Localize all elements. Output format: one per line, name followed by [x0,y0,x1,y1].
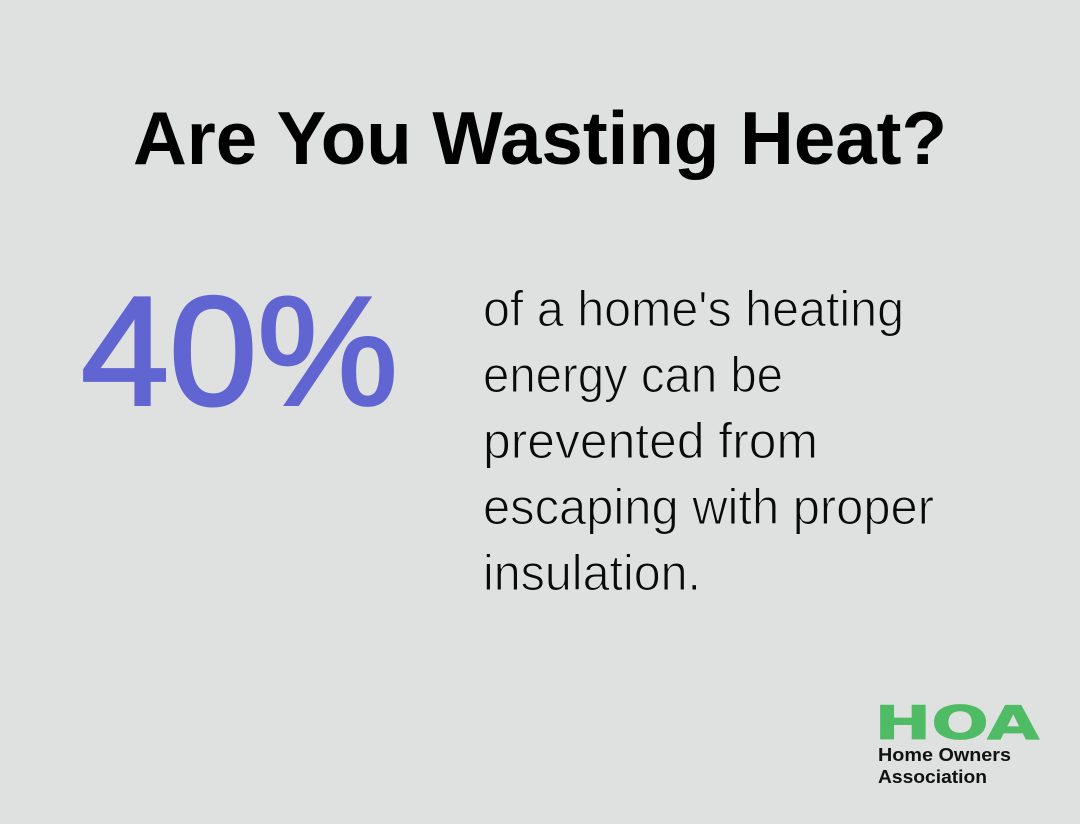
logo tagline: Home Owners [878,744,1011,765]
description text: energy can be [483,347,783,403]
description text: of a home's heating [483,281,904,337]
description text: escaping with proper [483,479,934,535]
description text [483,281,934,601]
logo wordmark HOA: HOA [874,696,1040,750]
description text: insulation. [483,545,701,601]
description text: prevented from [483,413,818,469]
logo: Home Owners Association [874,696,1040,787]
statistic: 40%: 40% [81,264,398,438]
logo tagline [878,744,1011,787]
title: Are You Wasting Heat? [133,96,947,180]
logo tagline: Association [878,766,987,787]
